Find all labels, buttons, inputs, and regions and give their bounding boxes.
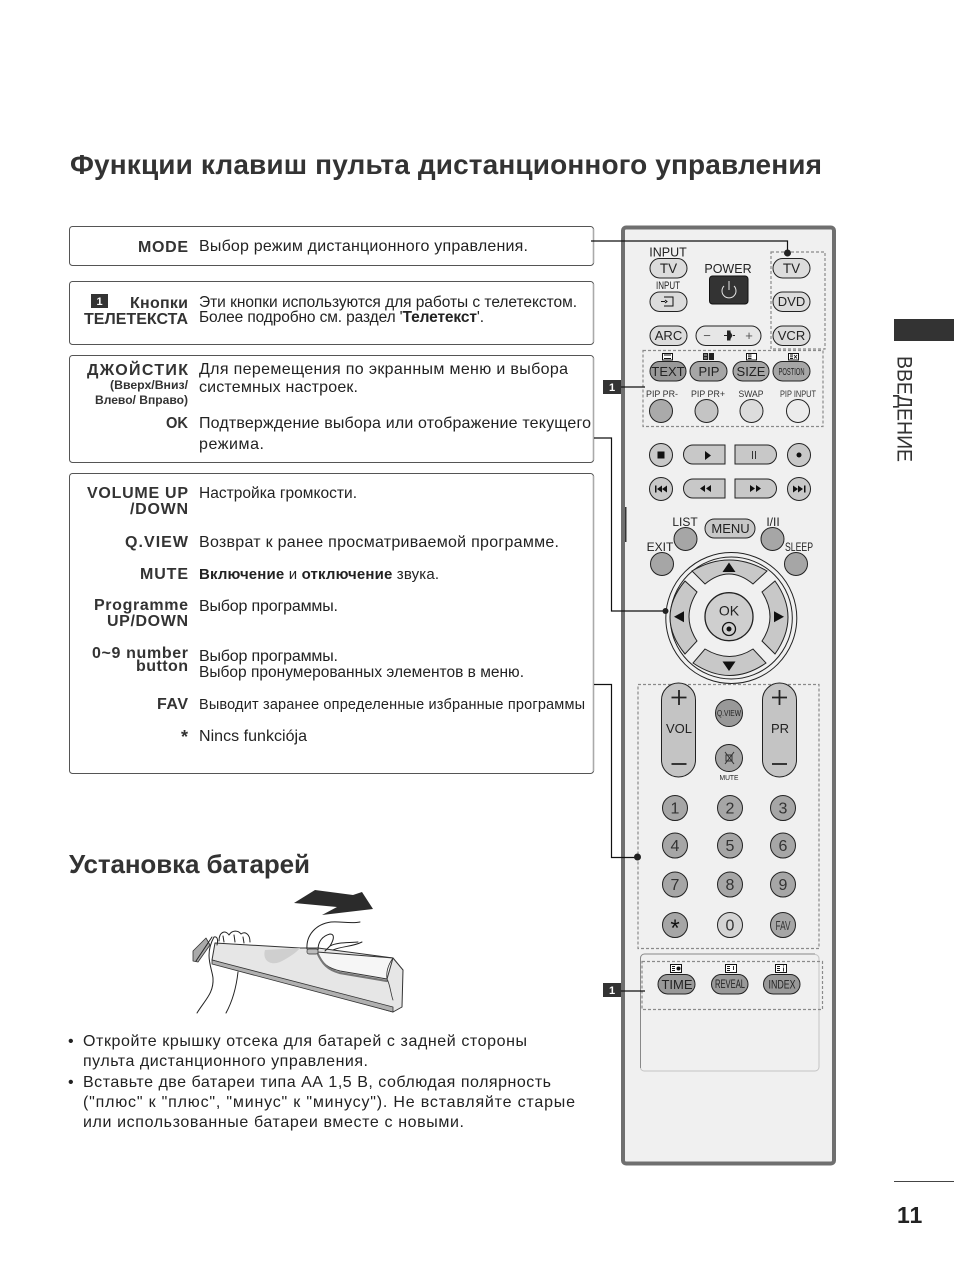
heading: battery installation: Установка батарей — [69, 849, 310, 879]
time, reveal and index buttons: REVEAL — [715, 979, 745, 991]
input buttons — [649, 246, 687, 346]
panel: mode: MODE — [138, 239, 188, 256]
teletext and PIP buttons: TEXT — [651, 364, 685, 379]
panel: mode: Выбор режим дистанционного управления. — [199, 238, 528, 255]
panel: volume and program functions: * — [181, 727, 188, 747]
panel: volume and program functions: MUTE — [140, 566, 188, 583]
volume and program rockers — [662, 683, 796, 782]
volume and program rockers: MUTE — [720, 775, 739, 782]
panel: volume and program functions: Programme — [94, 597, 188, 614]
dashed group outlines — [638, 252, 825, 1071]
number buttons: 4 — [671, 838, 680, 855]
panel: teletext: Эти кнопки используются для работы с телетекстом. — [199, 294, 577, 311]
mode buttons: TV — [783, 261, 800, 276]
panel: volume and program functions: Выбор программы. — [199, 648, 338, 665]
menu buttons: SLEEP — [785, 540, 813, 554]
panel: volume and program functions — [70, 474, 594, 774]
remote body — [193, 938, 403, 1012]
hand: right — [307, 922, 362, 951]
number buttons: 1 — [671, 800, 680, 818]
joystick — [666, 552, 797, 684]
text: battery instructions: или использованные батареи вместе с новыми. — [83, 1114, 464, 1131]
leader: joystick — [594, 438, 666, 611]
mode buttons: DVD — [778, 294, 805, 309]
time, reveal and index buttons — [658, 964, 800, 994]
number buttons: 7 — [671, 877, 680, 894]
menu buttons — [647, 515, 813, 576]
input buttons: INPUT — [656, 280, 680, 292]
callout: teletext bottom: 1 — [609, 985, 615, 997]
brightness button: + — [745, 328, 753, 343]
panel: joystick: ДЖОЙСТИК — [87, 360, 188, 379]
text: battery instructions: ("плюс" к "плюс", "минус" к "минусу"). Не вставляйте старые — [83, 1094, 575, 1111]
text: battery instructions: • — [68, 1074, 74, 1091]
power button — [704, 262, 752, 304]
teletext and PIP buttons: PIP PR- — [646, 389, 678, 400]
number buttons: 9 — [779, 877, 788, 894]
time, reveal and index buttons: INDEX — [768, 978, 796, 992]
teletext and PIP buttons: PIP INPUT — [780, 389, 816, 400]
hand: left — [196, 931, 250, 1013]
text: battery instructions: Вставьте две батареи типа АА 1,5 В, соблюдая полярность — [83, 1074, 551, 1091]
mode buttons — [773, 258, 810, 346]
callout: teletext top — [603, 380, 645, 394]
panel: volume and program functions: 0~9 number — [92, 645, 188, 662]
teletext and PIP buttons: SIZE — [737, 364, 766, 379]
section label: ВВЕДЕНИЕ — [892, 356, 916, 462]
panel: volume and program functions: Nincs funkciója — [199, 728, 307, 745]
panel: teletext: Кнопки — [130, 295, 188, 312]
panel: volume and program functions: FAV — [157, 696, 188, 713]
panel: volume and program functions: Q.VIEW — [125, 534, 189, 551]
number buttons: 2 — [726, 800, 735, 818]
panel: volume and program functions: Настройка громкости. — [199, 485, 357, 502]
joystick: OK — [719, 602, 740, 618]
remote body — [623, 228, 834, 1164]
panel: joystick: режима. — [199, 436, 264, 453]
power button: POWER — [704, 262, 752, 276]
panel: teletext: ТЕЛЕТЕКСТА — [84, 311, 188, 328]
panel: volume and program functions: UP/DOWN — [107, 613, 188, 630]
time, reveal and index buttons: TIME — [661, 977, 693, 992]
text: battery instructions — [68, 1033, 575, 1131]
menu buttons: EXIT — [647, 540, 674, 554]
panel: teletext: Более подробно см. раздел 'Телетекст'. — [199, 309, 484, 326]
callout: teletext bottom — [603, 983, 645, 997]
leader: volume and numbers — [594, 684, 641, 860]
teletext and PIP buttons: PIP — [699, 364, 719, 379]
arrow — [294, 890, 373, 915]
teletext and PIP buttons: POSTION — [778, 366, 804, 378]
mode buttons: VCR — [778, 328, 805, 343]
panel: joystick: Для перемещения по экранным меню и выбора — [199, 361, 568, 378]
number buttons: 6 — [779, 838, 788, 855]
callout: teletext top: 1 — [609, 382, 615, 394]
section tab — [894, 319, 954, 341]
input buttons: ARC — [655, 328, 682, 343]
brightness button: − — [703, 328, 711, 343]
page number — [894, 1181, 954, 1228]
text: battery instructions: пульта дистанционного управления. — [83, 1053, 368, 1070]
text: battery instructions: • — [68, 1033, 74, 1050]
panel: joystick: (Вверх/Вниз/ — [110, 378, 189, 392]
panel: joystick: системных настроек. — [199, 379, 358, 396]
panel: volume and program functions: Включение и отключение звука. — [199, 566, 439, 583]
page number: 11 — [897, 1202, 923, 1228]
panel: volume and program functions: Выбор программы. — [199, 598, 338, 615]
transport buttons — [650, 444, 810, 500]
panel: joystick — [70, 356, 594, 462]
panel: teletext — [70, 282, 594, 344]
menu buttons: MENU — [711, 521, 750, 536]
number buttons: 8 — [726, 877, 735, 894]
menu buttons: LIST — [672, 515, 698, 529]
text: battery instructions: Откройте крышку отсека для батарей с задней стороны — [83, 1033, 527, 1050]
menu buttons: I/II — [766, 515, 780, 529]
panel: volume and program functions: Возврат к ранее просматриваемой программе. — [199, 534, 559, 551]
panel: volume and program functions: VOLUME UP — [87, 485, 188, 502]
title: Функции клавиш пульта дистанционного управления — [70, 149, 822, 180]
volume and program rockers: PR — [771, 721, 789, 736]
number buttons: 0 — [726, 918, 735, 934]
volume and program rockers: VOL — [666, 721, 692, 736]
input buttons: TV — [660, 261, 677, 276]
number buttons: 5 — [726, 838, 735, 855]
joystick leader dot — [662, 608, 668, 614]
panel: volume and program functions: /DOWN — [130, 501, 188, 518]
panel: volume and program functions: Выводит заранее определенные избранные программы — [199, 697, 585, 713]
number buttons — [662, 796, 796, 942]
number buttons: * — [670, 915, 680, 942]
volume and program rockers: Q.VIEW — [717, 709, 741, 718]
panel: joystick: Подтверждение выбора или отображение текущего — [199, 415, 591, 432]
teletext and PIP buttons: PIP PR+ — [691, 389, 725, 400]
panel: volume and program functions: Выбор пронумерованных элементов в меню. — [199, 664, 524, 681]
panel: joystick: OK — [166, 415, 188, 432]
leader: mode — [591, 241, 791, 256]
panel: teletext: 1 — [96, 296, 103, 308]
panel: mode — [70, 226, 594, 266]
remote control — [623, 228, 834, 1164]
number buttons: FAV — [776, 918, 791, 933]
brightness button — [696, 326, 761, 346]
illustration: opening the battery cover — [193, 890, 403, 1013]
panel: joystick: Влево/ Вправо) — [95, 393, 188, 407]
teletext and PIP buttons — [646, 353, 816, 422]
number buttons: 3 — [779, 800, 788, 818]
teletext and PIP buttons: SWAP — [738, 389, 764, 400]
input buttons: INPUT — [649, 246, 687, 260]
panel: volume and program functions: button — [136, 658, 188, 675]
